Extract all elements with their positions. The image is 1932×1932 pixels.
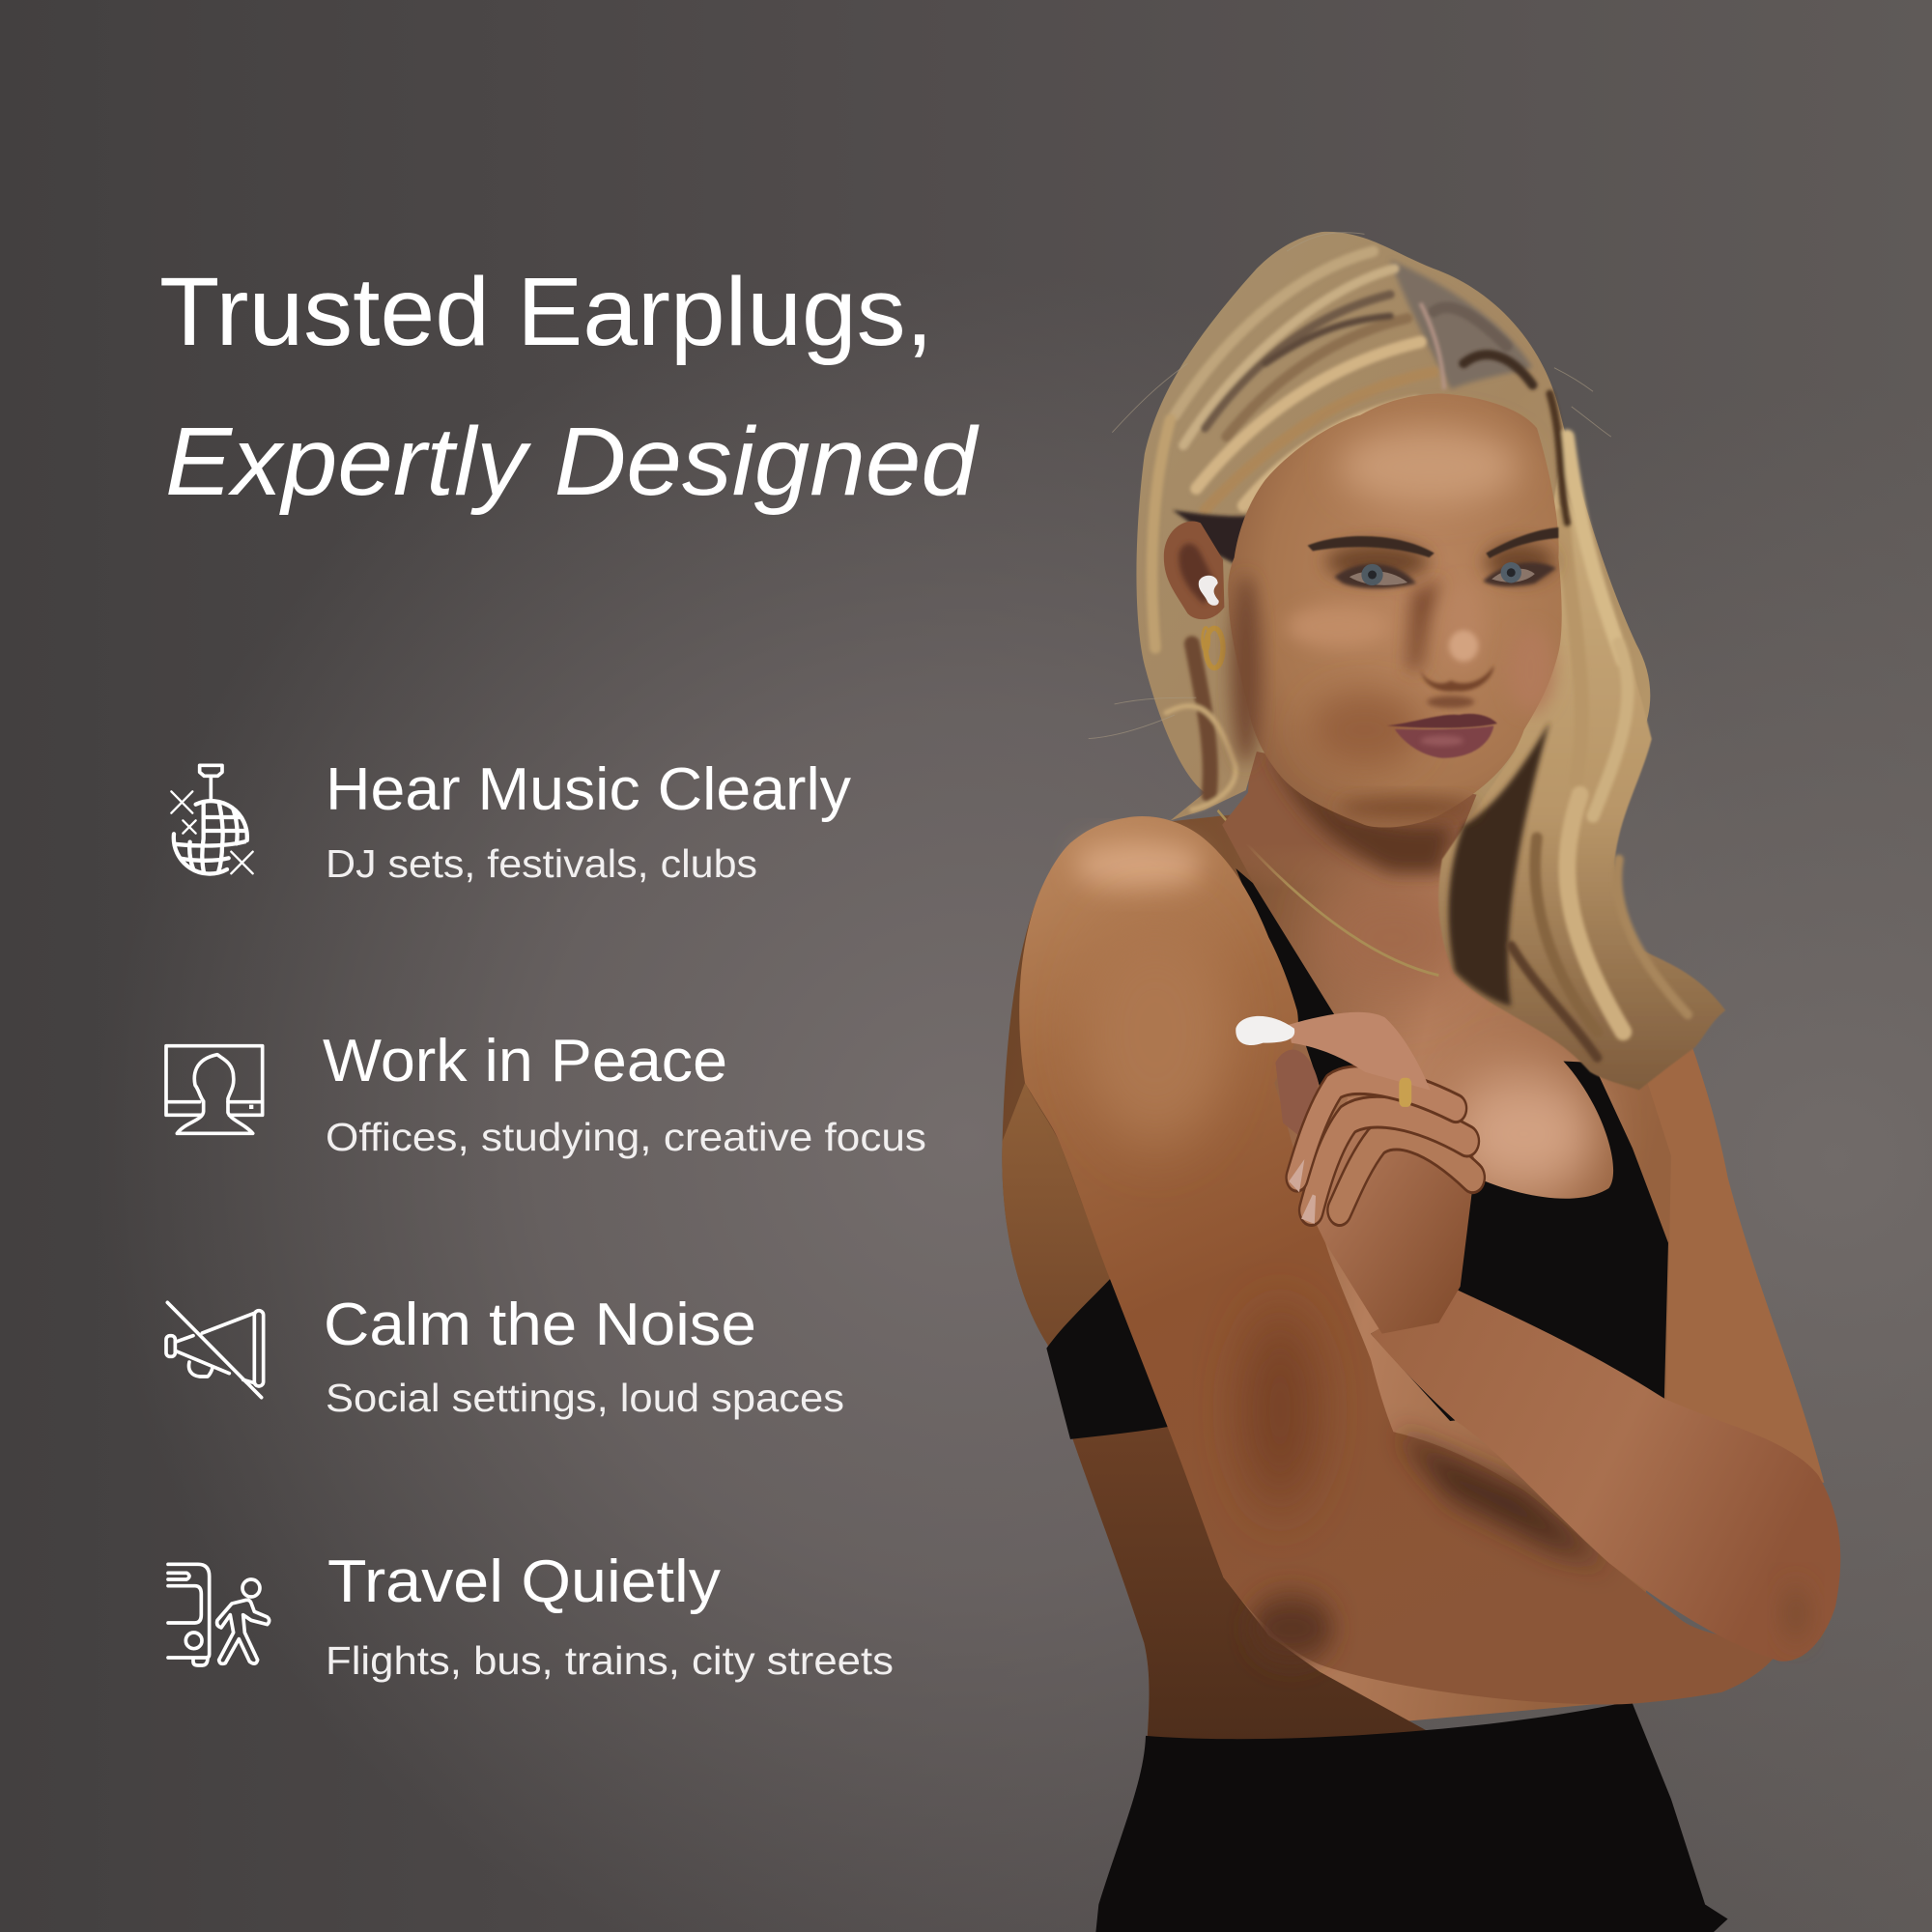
description: Social settings, loud spaces [326,1376,844,1420]
photo: woman holding earplug [1002,232,1840,1932]
icon: bus and walking person [168,1564,270,1665]
description: DJ sets, festivals, clubs [326,841,757,886]
chest highlights [1314,879,1598,1196]
top forearm [1371,1287,1840,1662]
feature: hear music clearly [171,756,851,886]
hand [1275,1012,1475,1334]
dark hair under chin [1449,722,1549,1006]
bra band [1046,1278,1173,1439]
bra strap [1236,868,1366,1087]
feature: work in peace [166,1028,926,1159]
body [1002,792,1840,1932]
right eye [1483,562,1556,586]
ear [1164,522,1224,619]
icon: muted megaphone [166,1302,264,1398]
heading: Work in Peace [323,1028,727,1094]
feature: calm the noise [166,1292,844,1420]
earplug in ear [1199,576,1219,606]
falling hair over chest [1438,471,1725,1090]
icon: disco ball [171,765,253,876]
lips [1387,714,1497,758]
ring [1399,1078,1411,1107]
bra cup [1371,1061,1668,1421]
feature: travel quietly [168,1548,894,1683]
hair roots [1390,260,1533,389]
hair strands [1152,251,1688,1058]
description: Offices, studying, creative focus [326,1115,926,1159]
title: Expertly Designed [165,408,980,516]
heading: Calm the Noise [324,1292,756,1358]
flyaway hairs [1089,233,1611,739]
gold hoop earring [1203,627,1223,668]
title: Trusted Earplugs, [159,258,933,366]
forearm shading [1781,1588,1810,1639]
hair [1136,232,1650,860]
torso [1002,792,1671,1745]
icon: person at monitor [166,1046,263,1133]
back shading [1002,1083,1438,1745]
neck shadow [1265,743,1451,872]
head [1089,232,1725,1090]
necklace [1218,810,1438,976]
part line [1421,303,1444,389]
ear inner shadow [1179,544,1213,605]
face shading [1231,428,1554,818]
title [159,258,980,516]
eyebrows [1308,527,1558,558]
arm shading [1073,841,1608,1661]
heading: Travel Quietly [327,1548,721,1615]
description: Flights, bus, trains, city streets [326,1638,894,1683]
dark hair behind ear [1173,510,1265,564]
nose [1421,583,1493,708]
far upper arm [1604,947,1824,1483]
neck [1222,708,1477,889]
face [1228,393,1562,828]
earplug held in fingers [1236,1016,1294,1045]
leggings [1095,1701,1728,1932]
upper arm and lower forearm [1019,816,1775,1705]
heading: Hear Music Clearly [326,756,851,823]
left eye [1334,564,1416,588]
